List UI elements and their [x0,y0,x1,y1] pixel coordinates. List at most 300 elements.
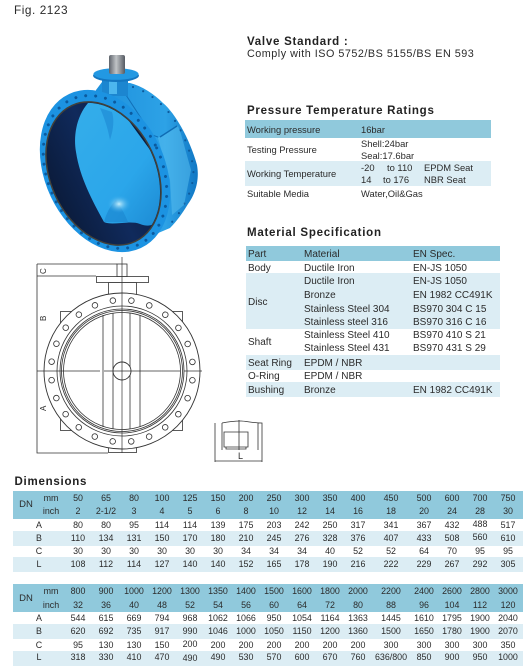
row: C: 200 [239,640,253,650]
row: working temperature: to 110 [387,162,412,173]
row: L: 900 [445,652,459,662]
row: C: 52 [353,546,363,556]
row: working pressure [245,120,491,138]
row: B: 1150 [292,626,312,636]
row: suitable media: Water,Oil&Gas [361,188,423,199]
row: B: 1500 [381,626,401,636]
row: mm: 500 [417,493,431,503]
row: disc: EN-JS 1050 [413,276,467,287]
row: inch: 24 [447,506,457,516]
table backgrounds [13,584,523,666]
row: A: 203 [267,520,281,530]
row: mm: 2000 [348,586,368,596]
row: A: 139 [211,520,225,530]
row: C: 200 [323,640,337,650]
row: bushing: Bronze [304,385,336,396]
row: mm: mm [44,493,58,503]
row: L: 127 [155,559,169,569]
row: mm: 100 [155,493,169,503]
dimension frame with A, B and C labels: B [39,316,48,321]
row: body [248,263,467,274]
row: L: 850 [417,652,431,662]
row: B: 735 [127,626,141,636]
row: A: 794 [155,613,169,623]
valve stem and top flange [93,55,139,96]
row: A [36,613,518,623]
row: C: 30 [73,546,83,556]
row: B: 1200 [320,626,340,636]
row: shaft: Stainless Steel 431 [304,343,390,354]
row: L: 1000 [498,652,518,662]
row: inch: 88 [386,600,396,610]
row: L: 490 [183,653,197,663]
row: mm [44,586,518,596]
table backgrounds [13,491,523,572]
row: inch: 10 [269,506,279,516]
row: A: 341 [384,520,398,530]
row: body: EN-JS 1050 [413,263,467,274]
row: working pressure: Working pressure [247,124,320,135]
dimension frame with A, B and C labels: C [39,268,48,274]
table: dimensions DN 800 to 3000 [13,584,523,666]
row: inch: 3 [132,506,137,516]
row: shaft: Shaft [248,337,272,348]
row: B: 134 [99,533,113,543]
row: B: 2070 [498,626,518,636]
row: L: 570 [267,652,281,662]
row: mm: 1400 [236,586,256,596]
row: disc: Stainless Steel 304 [304,304,390,315]
row: testing pressure: Seal:17.6bar [361,150,414,161]
seat ring edge [24,83,183,264]
standard compliance text: Comply with ISO 5752/BS 5155/BS EN 593 [247,48,474,60]
row: C: 64 [419,546,429,556]
row: inch: 4 [160,506,165,516]
row: C: 95 [73,640,83,650]
heading: material specification: Material Specification [247,227,382,239]
row: L: 670 [323,652,337,662]
row: inch: 20 [419,506,429,516]
row: A: 80 [73,520,83,530]
row: shaft: BS970 410 S 21 [413,330,486,341]
row: A: 317 [351,520,365,530]
valve disc [75,102,160,226]
row: mm: 2600 [442,586,462,596]
row: C: 34 [297,546,307,556]
row: disc: BS970 304 C 15 [413,304,487,315]
row: seat ring: Seat Ring [248,358,292,369]
row: B: 610 [501,533,515,543]
row: disc [246,273,500,329]
row: C [36,546,513,556]
row: inch: 18 [386,506,396,516]
row: body: Ductile Iron [304,263,355,274]
row: mm: mm [44,586,58,596]
row: B: 917 [155,626,169,636]
disc and hub [103,313,140,429]
row: o-ring [248,371,362,382]
row: C [36,639,515,650]
row: mm: 1300 [180,586,200,596]
row: C: 30 [157,546,167,556]
row: B: 276 [295,533,309,543]
row: C: 30 [185,546,195,556]
row: L: L [37,559,42,569]
row: A: 250 [323,520,337,530]
row: L: 292 [473,559,487,569]
row: inch: 6 [216,506,221,516]
row: L: 330 [99,652,113,662]
row: A: 95 [129,520,139,530]
valve rear flange and body [90,82,198,245]
row: C: 130 [127,640,141,650]
row: B: 328 [323,533,337,543]
row: B [36,626,518,636]
row: mm: 1000 [124,586,144,596]
row: B: 170 [183,533,197,543]
row: inch: 80 [353,600,363,610]
row: L: 760 [351,652,365,662]
row: C: 300 [445,640,459,650]
row: mm: 2200 [381,586,401,596]
row: suitable media [247,188,423,199]
row: shaft: Stainless Steel 410 [304,330,390,341]
row: C: 95 [475,546,485,556]
drawing: valve side elevation with L dimension [215,420,262,462]
row: L: 108 [71,559,85,569]
row: mm: 1350 [208,586,228,596]
row: L: 950 [473,652,487,662]
row: inch: 8 [244,506,249,516]
row: C: C [36,640,43,650]
row: C: 40 [325,546,335,556]
row: o-ring: EPDM / NBR [304,371,362,382]
row: working pressure: 16bar [361,124,385,135]
row: mm: 450 [384,493,398,503]
row: inch [43,506,513,516]
row: C: 300 [384,640,398,650]
row: C: 200 [295,640,309,650]
row: L: 216 [351,559,365,569]
row: inch: 120 [501,600,515,610]
flange rings [44,293,200,449]
row: inch: 52 [185,600,195,610]
header row: Part [248,249,267,260]
neck, top flange and stem [96,264,148,452]
row: C: 34 [269,546,279,556]
row: B: 210 [239,533,253,543]
row: B: 1650 [414,626,434,636]
row: working temperature: -20 [361,162,375,173]
row: seat ring: EPDM / NBR [304,358,362,369]
row: body: Body [248,263,271,274]
row: L: 114 [127,559,141,569]
row: shaft: BS970 431 S 29 [413,343,486,354]
row: L: 267 [445,559,459,569]
row: inch: 104 [445,600,459,610]
row: mm: 900 [99,586,113,596]
row: B: 1050 [264,626,284,636]
row: mm: 800 [71,586,85,596]
row: C: 200 [183,639,197,649]
heading: pressure temperature ratings: Pressure Temperature Ratings [247,105,435,117]
row: B: 433 [417,533,431,543]
row: working temperature: Working Temperature [247,168,336,179]
row: testing pressure: Shell:24bar [361,138,408,149]
row: mm: 350 [323,493,337,503]
row: B: 245 [267,533,281,543]
row: A: 432 [445,520,459,530]
row: mm: 300 [295,493,309,503]
row: working temperature: to 176 [383,174,409,185]
row: B: B [36,626,42,636]
row: L: 222 [384,559,398,569]
row: inch: 56 [241,600,251,610]
row: C: 150 [155,640,169,650]
row: C: 34 [241,546,251,556]
row: A: 1445 [381,613,401,623]
row: B: 1900 [470,626,490,636]
row: seat ring [246,355,500,370]
dimension frame with A, B and C labels [37,264,117,453]
row: inch: 2 [76,506,81,516]
row: mm: 65 [101,493,111,503]
row: A: 615 [99,613,113,623]
row: mm: 125 [183,493,197,503]
row: disc: Stainless steel 316 [304,317,388,328]
row: A: A [36,520,42,530]
row: L: 190 [323,559,337,569]
row: inch: inch [43,506,59,516]
header row: Material [304,249,340,260]
row: B: 110 [71,533,85,543]
row: disc: Ductile Iron [304,276,355,287]
row: A: 968 [183,613,197,623]
row: mm: 600 [445,493,459,503]
row: C: 300 [417,640,431,650]
row: mm: 700 [473,493,487,503]
row: L: 178 [295,559,309,569]
row: inch: 14 [325,506,335,516]
row: inch: inch [43,600,59,610]
row: mm: 150 [211,493,225,503]
row: L: 165 [267,559,281,569]
row: mm: 1600 [292,586,312,596]
row: A: 1363 [348,613,368,623]
row: working temperature: EPDM Seat [424,162,473,173]
row: inch: 64 [297,600,307,610]
row: mm: 1500 [264,586,284,596]
row: inch: 5 [188,506,193,516]
row: C: 200 [267,640,281,650]
row: A: 517 [501,520,515,530]
row: A: 544 [71,613,85,623]
row: A: 242 [295,520,309,530]
row: B: 180 [211,533,225,543]
row: L: L [37,652,42,662]
row: L: 140 [183,559,197,569]
row: B: 407 [384,533,398,543]
row: disc: BS970 316 C 16 [413,317,487,328]
row: A: 114 [155,520,169,530]
row: C: 130 [99,640,113,650]
row: B: 1360 [348,626,368,636]
row: C: 200 [351,640,365,650]
row: testing pressure [247,138,414,161]
row: C: 30 [101,546,111,556]
row: inch: 28 [475,506,485,516]
row: mm: 80 [129,493,139,503]
flange bolt holes [20,75,190,269]
row: inch: 16 [353,506,363,516]
row: suitable media: Suitable Media [247,188,310,199]
DN label: DN [19,499,33,510]
row: A: 1610 [414,613,434,623]
valve front flange [15,69,195,273]
row: B: 620 [71,626,85,636]
photo: butterfly valve [40,55,198,252]
row: L: 600 [295,652,309,662]
figure label: Fig. 2123 [14,3,68,17]
row: C: 52 [386,546,396,556]
row: C: 30 [129,546,139,556]
row: B: 990 [183,626,197,636]
row: A: 1164 [320,613,340,623]
row: shaft [248,330,486,354]
row: inch: 60 [269,600,279,610]
row: L: 410 [127,652,141,662]
row: A: 488 [473,519,487,529]
row: L: 470 [155,652,169,662]
row: B: 376 [351,533,365,543]
row: bushing [246,382,500,397]
row: B: B [36,533,42,543]
row: A: 1900 [470,613,490,623]
heading: valve standard: Valve Standard : [247,36,348,48]
dimension frame with A, B and C labels: A [39,405,48,411]
row: B: 150 [155,533,169,543]
drawing: valve side elevation with L dimension: L [238,451,243,461]
row: inch [43,600,515,610]
row: mm [44,493,515,503]
row: disc: Bronze [304,290,336,301]
row: L: 140 [211,559,225,569]
row: C: 200 [211,640,225,650]
row: A: 950 [267,613,281,623]
row: inch: 40 [129,600,139,610]
row: A: 367 [417,520,431,530]
row: B: 692 [99,626,113,636]
row: L: 530 [239,652,253,662]
row: working temperature [245,161,491,186]
table: pressure temperature ratings [245,120,491,199]
row: mm: 400 [351,493,365,503]
row: inch: 96 [419,600,429,610]
row: L [37,652,518,663]
row: C: 95 [503,546,513,556]
row: L: 152 [239,559,253,569]
row: C: C [36,546,43,556]
row: bushing: Bushing [248,385,284,396]
centre lines [37,257,202,453]
row: C: 350 [501,640,515,650]
row: inch: 12 [297,506,307,516]
row: inch: 32 [73,600,83,610]
row: testing pressure: Testing Pressure [247,144,317,155]
drawing: valve front elevation [37,257,202,453]
row: mm: 1800 [320,586,340,596]
row: L: 490 [211,652,225,662]
square lugs [60,312,182,430]
heading: dimensions: Dimensions [14,476,87,488]
row: A: 1795 [442,613,462,623]
row: L: 229 [417,559,431,569]
row: inch: 2-1/2 [96,506,116,516]
row: L: 112 [99,559,113,569]
row: inch: 72 [325,600,335,610]
row: A: 175 [239,520,253,530]
row: C: 30 [213,546,223,556]
row: C: 70 [447,546,457,556]
bolt holes [42,291,202,451]
row: mm: 1200 [152,586,172,596]
row: L: 305 [501,559,515,569]
row: B: 131 [127,533,141,543]
row: B: 1000 [236,626,256,636]
row: inch: 48 [157,600,167,610]
row: disc: Disc [248,297,267,308]
row: inch: 112 [473,600,487,610]
header row: EN Spec. [413,249,455,260]
row: o-ring: O-Ring [248,371,280,382]
row: mm: 200 [239,493,253,503]
row: working temperature: NBR Seat [424,174,466,185]
row: mm: 250 [267,493,281,503]
row: A: 1066 [236,613,256,623]
row: A: 114 [183,520,197,530]
row: A: 2040 [498,613,518,623]
row: inch: 36 [101,600,111,610]
row: inch: 30 [503,506,513,516]
row: inch: 54 [213,600,223,610]
row: mm: 2800 [470,586,490,596]
row: L: 318 [71,652,85,662]
row: bushing: EN 1982 CC491K [413,385,493,396]
table: material specification [246,246,500,397]
row: B [36,532,515,543]
row: B: 508 [445,533,459,543]
row: disc: EN 1982 CC491K [413,290,493,301]
row: B: 1046 [208,626,228,636]
row: C: 300 [473,640,487,650]
row: L [37,559,515,569]
row: B: 560 [473,532,487,542]
header row [246,246,500,261]
table: dimensions DN 50 to 750 [13,491,523,572]
row: mm: 750 [501,493,515,503]
row: B: 1780 [442,626,462,636]
row: L: 636/800 [375,652,407,662]
row: A: 80 [101,520,111,530]
row: mm: 2400 [414,586,434,596]
row: working temperature: 14 [361,174,371,185]
DN label: DN [19,593,33,604]
row: A: 669 [127,613,141,623]
rubber seat and dark interior [24,83,183,264]
row: A [36,519,515,530]
row: mm: 50 [73,493,83,503]
row: A: 1054 [292,613,312,623]
